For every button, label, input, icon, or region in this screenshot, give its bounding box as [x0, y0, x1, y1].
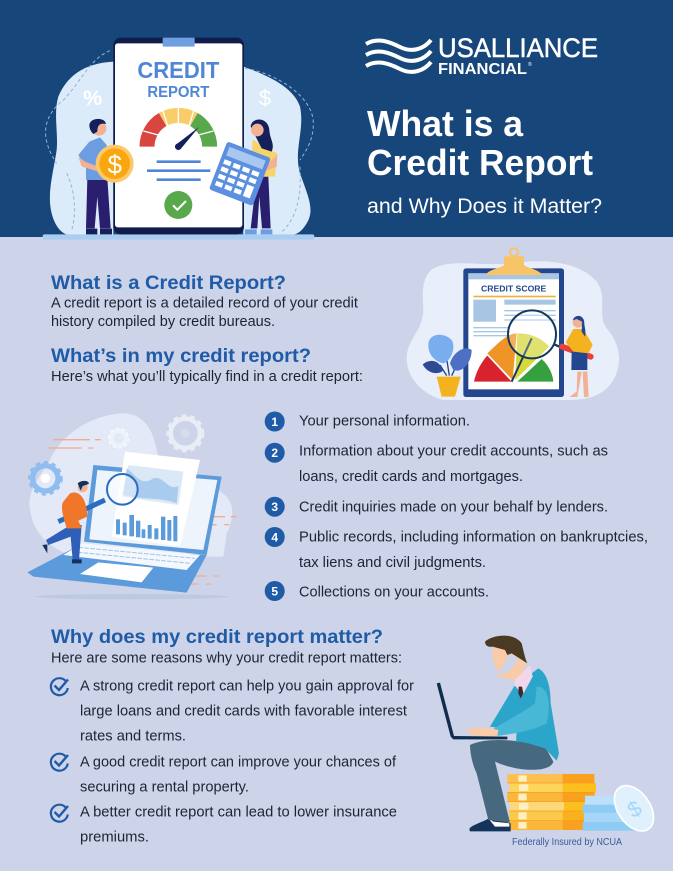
- section: what's in my credit report heading: [51, 345, 363, 385]
- reason 3: [51, 805, 397, 846]
- title: What is a: [367, 103, 524, 144]
- reason 2: [51, 754, 397, 796]
- reason 1: rates and terms.: [80, 729, 186, 745]
- section: what is a credit report: A credit report is a detailed record of your credit: [51, 296, 358, 312]
- item 3: Credit inquiries made on your behalf by lenders.: [299, 500, 608, 516]
- item 4: Public records, including information on bankruptcies,: [299, 530, 648, 546]
- item 1: [265, 412, 470, 432]
- subtitle: and Why Does it Matter?: [367, 195, 602, 218]
- title: [367, 103, 593, 183]
- illustration: credit score clipboard: [407, 248, 619, 400]
- item 5: [265, 581, 489, 601]
- illustration: credit report phone with two people: $: [107, 149, 122, 179]
- logo: USAlliance Financial: [366, 33, 598, 78]
- section: what's in my credit report heading: What’s in my credit report?: [51, 345, 311, 367]
- illustration: credit report phone with two people: $: [259, 86, 271, 111]
- item 2: 2: [271, 446, 278, 460]
- illustration: man with laptop sitting on coins: [437, 636, 662, 838]
- illustration: laptop and magnifier: [27, 413, 237, 599]
- item 4: 4: [271, 530, 278, 544]
- item 4: tax liens and civil judgments.: [299, 555, 486, 571]
- reason 3: premiums.: [80, 830, 149, 846]
- reason 2: A good credit report can improve your chances of: [80, 755, 397, 771]
- section: what's in my credit report heading: Here’s what you’ll typically find in a credit report:: [51, 369, 363, 385]
- reason 3: A better credit report can lead to lower insurance: [80, 805, 397, 821]
- reason 1: A strong credit report can help you gain approval for: [80, 679, 414, 695]
- item 1: Your personal information.: [299, 414, 470, 430]
- illustration: credit report phone with two people: CREDIT: [137, 57, 219, 83]
- reason 1: [51, 678, 414, 745]
- logo: USAlliance Financial: FINANCIAL: [438, 61, 527, 78]
- item 1: 1: [271, 415, 278, 429]
- section: why does my credit report matter heading: Here are some reasons why your credit report matters:: [51, 651, 402, 667]
- section: what is a credit report: What is a Credit Report?: [51, 272, 286, 294]
- section: what is a credit report: [51, 272, 358, 330]
- logo: USAlliance Financial: USALLIANCE: [438, 33, 598, 63]
- item 2: loans, credit cards and mortgages.: [299, 469, 523, 485]
- numbered list: [265, 412, 648, 601]
- item 2: [265, 443, 608, 485]
- illustration: credit score clipboard: CREDIT SCORE: [481, 284, 547, 294]
- title: Credit Report: [367, 142, 593, 183]
- section: why does my credit report matter heading: Why does my credit report matter?: [51, 626, 383, 648]
- item 5: Collections on your accounts.: [299, 585, 489, 601]
- item 5: 5: [271, 584, 278, 598]
- logo: USAlliance Financial: ®: [528, 61, 532, 68]
- header banner: [0, 0, 673, 237]
- section: what is a credit report: history compiled by credit bureaus.: [51, 314, 275, 330]
- reasons checklist: [51, 678, 414, 846]
- illustration: credit report phone with two people: %: [83, 86, 102, 110]
- illustration: credit report phone with two people: [43, 38, 314, 240]
- item 2: Information about your credit accounts, such as: [299, 444, 608, 460]
- reason 1: large loans and credit cards with favorable interest: [80, 704, 407, 720]
- illustration: credit report phone with two people: REPORT: [147, 84, 210, 101]
- item 3: 3: [271, 500, 278, 514]
- section: why does my credit report matter heading: [51, 626, 402, 667]
- illustration: man with laptop sitting on coins: $: [623, 795, 646, 823]
- footer note: Federally Insured by NCUA: [512, 837, 622, 848]
- reason 2: securing a rental property.: [80, 780, 249, 796]
- item 4: [265, 527, 648, 571]
